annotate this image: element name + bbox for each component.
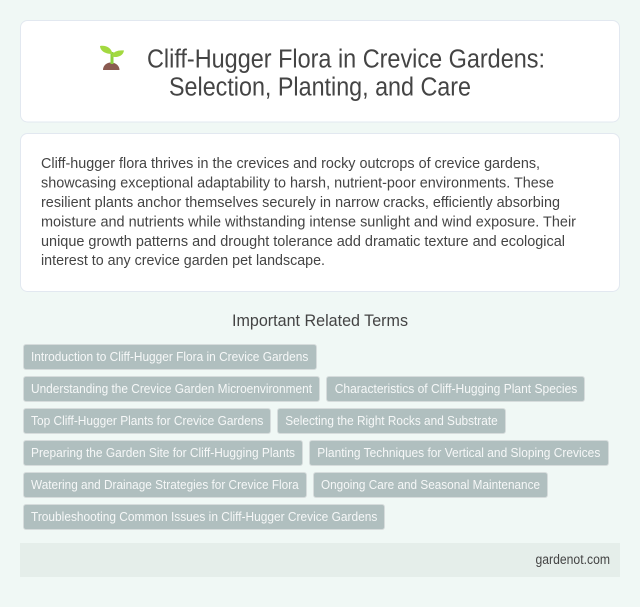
- icon: seedling: [100, 46, 124, 70]
- chip: top plants: [24, 408, 270, 434]
- chip: microenvironment: Understanding the Crevice Garden Microenvironment: [31, 381, 312, 396]
- text block: description: showcasing exceptional adaptability to harsh, nutrient-poor environments. These: [41, 174, 554, 192]
- text block: description: [41, 155, 576, 269]
- title: [147, 46, 545, 102]
- text block: description: resilient plants anchor themselves securely in narrow cracks, efficiently absorbing: [41, 194, 560, 211]
- chip: ongoing care: Ongoing Care and Seasonal Maintenance: [321, 477, 540, 492]
- text block: description: unique growth patterns and drought tolerance add dramatic texture and ecological: [41, 233, 565, 250]
- title: Cliff-Hugger Flora in Crevice Gardens:: [147, 46, 545, 74]
- chip: characteristics: Characteristics of Cliff-Hugging Plant Species: [335, 381, 578, 396]
- chip: ongoing care: [314, 472, 548, 498]
- chip: microenvironment: [24, 376, 320, 402]
- chip: preparing site: Preparing the Garden Site for Cliff-Hugging Plants: [31, 445, 295, 460]
- chip: planting techniques: Planting Techniques for Vertical and Sloping Crevices: [317, 445, 601, 460]
- title: Selection, Planting, and Care: [169, 74, 471, 102]
- chip: introduction: [24, 344, 316, 370]
- chip: rocks and substrate: Selecting the Right Rocks and Substrate: [285, 413, 498, 428]
- footer bar: [20, 543, 620, 577]
- chip: preparing site: [24, 440, 302, 466]
- panel: description card: [20, 134, 620, 292]
- heading: related terms: Important Related Terms: [232, 312, 408, 330]
- footer source text: gardenot.com: [536, 552, 610, 567]
- panel: related term chips: [24, 344, 608, 530]
- panel: header card: [20, 20, 620, 122]
- chip: rocks and substrate: [278, 408, 506, 434]
- chip: watering and drainage: [24, 472, 306, 498]
- chip: introduction: Introduction to Cliff-Hugger Flora in Crevice Gardens: [31, 349, 309, 364]
- chip: watering and drainage: Watering and Drainage Strategies for Crevice Flora: [31, 477, 299, 492]
- chip: top plants: Top Cliff-Hugger Plants for Crevice Gardens: [31, 413, 264, 428]
- chip: troubleshooting: [24, 504, 384, 530]
- text block: description: interest to any crevice garden pet landscape.: [41, 252, 325, 269]
- chip: characteristics: [326, 376, 584, 402]
- text block: description: Cliff-hugger flora thrives in the crevices and rocky outcrops of crevice gardens,: [41, 155, 540, 172]
- chip: troubleshooting: Troubleshooting Common Issues in Cliff-Hugger Crevice Gardens: [31, 509, 378, 524]
- chip: planting techniques: [310, 440, 608, 466]
- text block: description: moisture and nutrients while withstanding intense sunlight and wind exposure. Their: [41, 214, 576, 230]
